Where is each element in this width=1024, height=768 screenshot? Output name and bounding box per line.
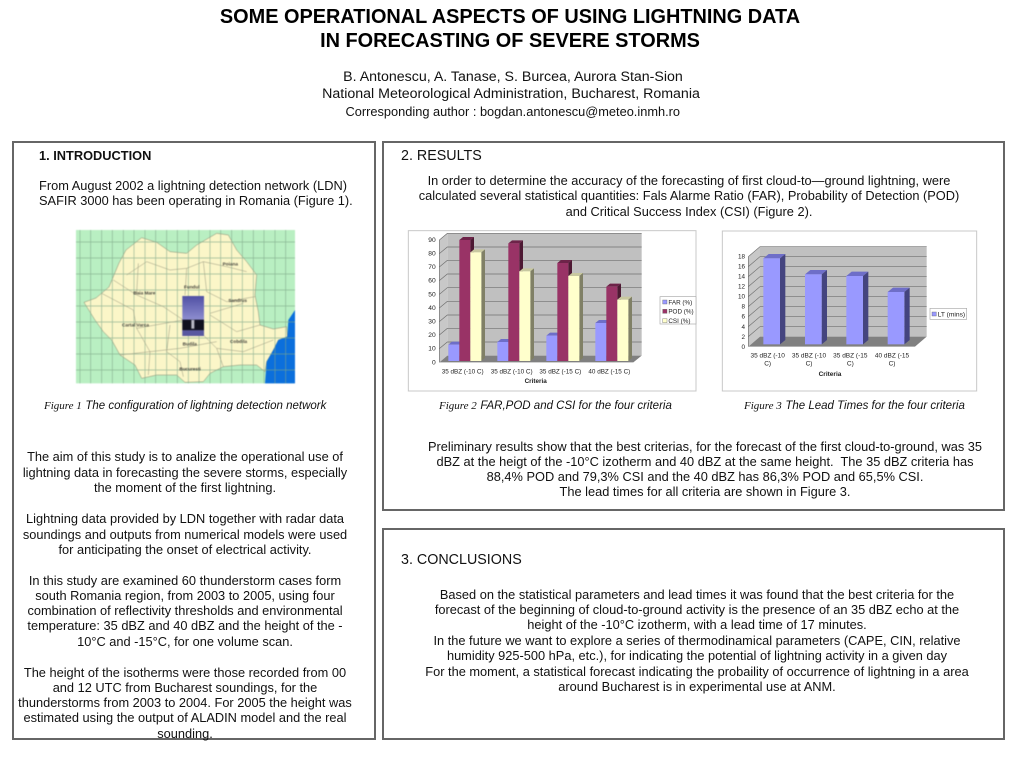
city labels bbox=[122, 262, 247, 372]
LT bars bbox=[763, 254, 910, 344]
axis labels: 10 bbox=[428, 346, 436, 353]
text: results intro bbox=[419, 172, 959, 218]
axis labels: 12 bbox=[738, 283, 745, 290]
legend: POD (%) bbox=[668, 309, 694, 316]
authors and affiliation: B. Antonescu, A. Tanase, S. Burcea, Aurora Stan-Sion bbox=[343, 69, 683, 85]
caption: figure 1: Figure 1 The configuration of lightning detection network bbox=[44, 400, 326, 412]
text: aim of study: lightning data in forecasting the severe storms, especially bbox=[23, 464, 347, 480]
city labels: Cobdila bbox=[230, 339, 247, 344]
text: results intro: In order to determine the accuracy of the forecasting of first cloud-to—ground lightning, were bbox=[428, 172, 950, 188]
text: lightning data: soundings and outputs from numerical models were used bbox=[23, 526, 347, 542]
authors and affiliation bbox=[322, 69, 700, 119]
caption: figure 2: Figure 2 FAR,POD and CSI for the four criteria bbox=[439, 400, 672, 412]
city labels: Cartal Varca bbox=[122, 322, 149, 327]
text: thunderstorm cases bbox=[27, 572, 343, 649]
axis labels bbox=[428, 237, 436, 366]
city labels: Poiana bbox=[223, 262, 238, 267]
text: isotherm heights: and 12 UTC from Bucharest soundings, for the bbox=[53, 680, 317, 695]
figure 3: lead time bar chart: Criteria bbox=[819, 371, 842, 378]
text: conclusions: around Bucharest is in experimental use at ANM. bbox=[558, 679, 836, 694]
text: preliminary results: dBZ at the heigt of the -10°C izotherm and 40 dBZ at the same height. The 35 dBZ criteria has bbox=[437, 454, 973, 469]
text: thunderstorm cases: 10°C and -15°C, for one volume scan. bbox=[77, 634, 293, 649]
text: preliminary results: The lead times for all criteria are shown in Figure 3. bbox=[560, 484, 850, 499]
figure 2: FAR POD CSI bar chart: Criteria bbox=[525, 378, 547, 385]
text: isotherm heights: The height of the isotherms were those recorded from 00 bbox=[24, 664, 346, 680]
figure 3: lead time bar chart: 35 dBZ (-10 bbox=[751, 352, 785, 359]
axis labels: 80 bbox=[428, 251, 436, 258]
figure 2: FAR POD CSI bar chart: 35 dBZ (-10 C) bbox=[442, 369, 484, 376]
axis labels: 20 bbox=[428, 332, 436, 339]
text: results intro: calculated several statistical quantities: Fals Alarme Ratio (FAR), Probability of Detection (POD) bbox=[419, 188, 959, 203]
figure 3: lead time bar chart bbox=[722, 230, 978, 392]
POD bars bbox=[459, 237, 621, 361]
figure 2: FAR POD CSI bar chart: 35 dBZ (-10 C) bbox=[491, 369, 533, 376]
city labels: Fundul bbox=[184, 284, 200, 289]
axis labels: 0 bbox=[432, 359, 436, 366]
text: conclusions: humidity 925-500 hPa, etc.), for indicating the potential of lightning activity in a given day bbox=[447, 648, 947, 663]
figure 1: map of Romania bbox=[76, 230, 296, 384]
text: isotherm heights bbox=[18, 664, 352, 741]
text: conclusions: height of the -10°C izotherm, with a lead time of 17 minutes. bbox=[527, 617, 867, 632]
land bbox=[84, 233, 287, 382]
text: aim of study: the moment of the first lightning. bbox=[94, 480, 276, 495]
heading: introduction: 1. INTRODUCTION bbox=[39, 148, 151, 163]
text: aim of study bbox=[23, 449, 348, 495]
axis labels: 10 bbox=[738, 294, 745, 301]
heading: conclusions: 3. CONCLUSIONS bbox=[401, 552, 522, 568]
text: thunderstorm cases: In this study are examined 60 thunderstorm cases form bbox=[29, 572, 341, 588]
figure 3: lead time bar chart: C) bbox=[806, 361, 812, 368]
axis labels: 8 bbox=[741, 304, 745, 311]
text: preliminary results: 88,4% POD and 79,3% CSI and the 40 dBZ has 86,3% POD and 65,5% CSI. bbox=[487, 469, 923, 484]
authors and affiliation: National Meteorological Administration, Bucharest, Romania bbox=[322, 86, 700, 102]
text: conclusions: In the future we want to explore a series of thermodinamical parameters (CAPE, CIN, relative bbox=[433, 633, 961, 648]
text: conclusions: forecast of the beginning of cloud-to-ground activity is the presence of an 35 dBZ echo at the bbox=[435, 602, 959, 617]
legend bbox=[930, 308, 967, 319]
text: lightning data: Lightning data provided by LDN together with radar data bbox=[26, 511, 344, 526]
axis labels bbox=[738, 253, 745, 351]
text: results intro: and Critical Success Index (CSI) (Figure 2). bbox=[566, 204, 812, 218]
axis labels: 18 bbox=[738, 253, 745, 260]
caption: figure 3: Figure 3 The Lead Times for the four criteria bbox=[744, 400, 965, 412]
axis labels: 70 bbox=[428, 264, 436, 271]
figure 2: FAR POD CSI bar chart: 40 dBZ (-15 C) bbox=[588, 369, 630, 376]
text: network intro: SAFIR 3000 has been operating in Romania (Figure 1). bbox=[39, 193, 353, 208]
text: thunderstorm cases: combination of reflectivity thresholds and environmental bbox=[27, 603, 343, 618]
text: isotherm heights: thunderstorms from 2003 to 2004. For 2005 the height was bbox=[18, 695, 352, 710]
text: conclusions: For the moment, a statistical forecast indicating the probaility of occurrence of lightning in a area bbox=[425, 664, 969, 679]
authors and affiliation: Corresponding author : bogdan.antonescu@meteo.inmh.ro bbox=[345, 104, 680, 119]
text: network intro: From August 2002 a lightning detection network (LDN) bbox=[39, 178, 347, 193]
text: isotherm heights: sounding. bbox=[157, 726, 213, 741]
axis labels: 16 bbox=[738, 263, 745, 270]
figure 2: FAR POD CSI bar chart: 35 dBZ (-15 C) bbox=[539, 369, 581, 376]
city labels: Bucuresti bbox=[179, 367, 201, 372]
axis labels: 0 bbox=[741, 344, 745, 351]
axis labels: 60 bbox=[428, 278, 436, 285]
axis labels: 40 bbox=[428, 305, 436, 312]
station photo bbox=[182, 296, 204, 336]
city labels: Budila bbox=[183, 342, 197, 347]
axis labels: 2 bbox=[741, 334, 745, 341]
legend: CSI (%) bbox=[668, 318, 690, 325]
text: lightning data: for anticipating the onset of electrical activity. bbox=[58, 542, 311, 557]
text: thunderstorm cases: temperature: 35 dBZ and 40 dBZ and the height of the - bbox=[27, 618, 343, 633]
title: SOME OPERATIONAL ASPECTS OF USING LIGHTNING DATA bbox=[220, 6, 800, 28]
axis labels: 30 bbox=[428, 319, 436, 326]
title: IN FORECASTING OF SEVERE STORMS bbox=[320, 30, 700, 52]
figure 3: lead time bar chart: C) bbox=[847, 361, 854, 368]
legend: FAR (%) bbox=[668, 299, 692, 306]
heading: results: 2. RESULTS bbox=[401, 148, 482, 164]
axis labels: 4 bbox=[741, 324, 745, 331]
axis labels: 6 bbox=[741, 314, 745, 321]
text: conclusions: Based on the statistical parameters and lead times it was found that the best criteria for the bbox=[440, 586, 954, 602]
figure 3: lead time bar chart: 35 dBZ (-10 bbox=[792, 352, 827, 359]
text: preliminary results: Preliminary results show that the best criterias, for the forecast of the first cloud-to-ground, was 35 bbox=[428, 438, 982, 454]
title bbox=[220, 6, 800, 52]
FAR bars bbox=[448, 320, 610, 361]
CSI bars bbox=[470, 249, 632, 361]
city labels: Baia Mare bbox=[133, 290, 156, 295]
figure 3: lead time bar chart: 35 dBZ (-15 bbox=[833, 352, 868, 359]
figure 2: FAR POD CSI bar chart bbox=[408, 230, 696, 392]
panel: conclusions bbox=[382, 528, 1005, 740]
figure 3: lead time bar chart: C) bbox=[764, 361, 771, 368]
text: conclusions bbox=[425, 586, 969, 694]
axis labels: 14 bbox=[738, 273, 745, 280]
panel: results bbox=[382, 141, 1005, 511]
text: lightning data bbox=[23, 511, 347, 557]
axis labels: 50 bbox=[428, 291, 436, 298]
text: preliminary results bbox=[428, 438, 982, 499]
text: network intro bbox=[39, 178, 353, 208]
text: thunderstorm cases: south Romania region, from 2003 to 2005, using four bbox=[35, 588, 335, 603]
figure 3: lead time bar chart: C) bbox=[889, 361, 895, 368]
panel: introduction bbox=[12, 141, 376, 740]
legend bbox=[660, 297, 696, 325]
text: aim of study: The aim of this study is to analize the operational use of bbox=[27, 449, 343, 464]
axis labels: 90 bbox=[428, 237, 436, 244]
sea bbox=[265, 310, 295, 383]
legend: LT (mins) bbox=[938, 311, 965, 318]
figure 3: lead time bar chart: 40 dBZ (-15 bbox=[875, 352, 910, 359]
city labels: Sandrus bbox=[228, 298, 247, 303]
text: isotherm heights: estimated using the output of ALADIN model and the real bbox=[24, 710, 346, 725]
